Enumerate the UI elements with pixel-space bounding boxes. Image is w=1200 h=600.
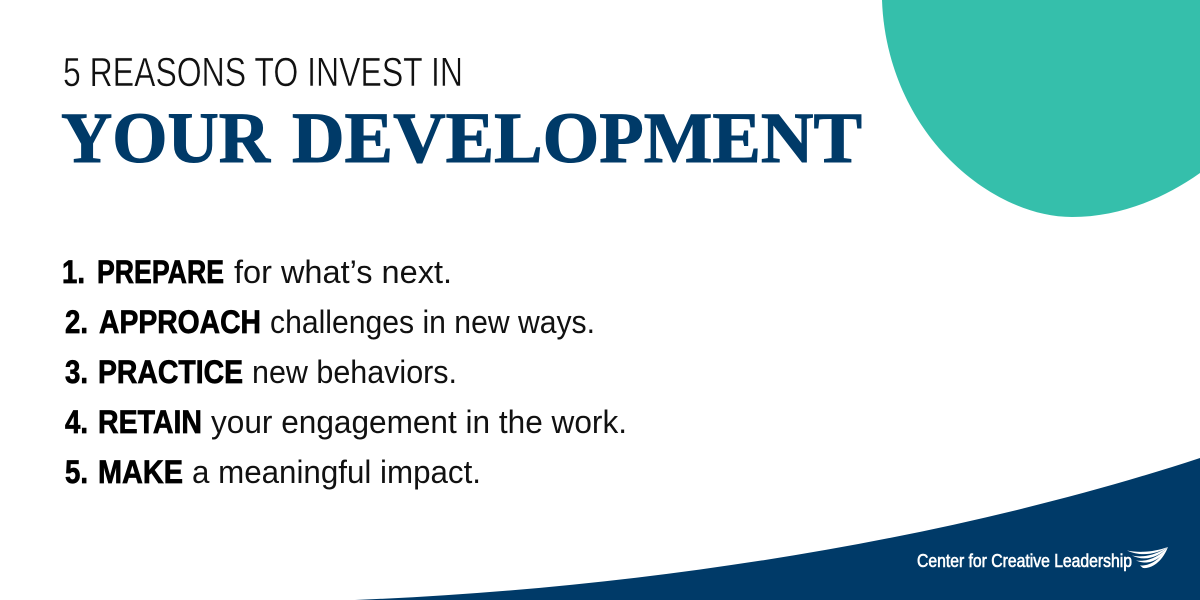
reason 5 bbox=[65, 454, 481, 490]
reason 1: for what’s next. bbox=[234, 254, 452, 290]
reason 1 bbox=[62, 254, 452, 290]
reason 1: PREPARE bbox=[97, 254, 224, 290]
teal blob bbox=[882, 0, 1200, 217]
reason 4: 4. bbox=[65, 404, 88, 440]
heading: 5 reasons to invest in: 5 REASONS TO INVEST IN bbox=[63, 49, 463, 95]
navy swoosh bbox=[355, 458, 1200, 600]
reasons list bbox=[62, 254, 627, 490]
reason 3: new behaviors. bbox=[252, 354, 457, 390]
reason 2: 2. bbox=[65, 304, 88, 340]
reason 5: a meaningful impact. bbox=[192, 454, 481, 490]
heading: your development: YOUR bbox=[61, 98, 271, 178]
logo: Center for Creative Leadership bbox=[917, 547, 1168, 571]
reason 2: challenges in new ways. bbox=[270, 304, 595, 340]
reason 5: 5. bbox=[65, 454, 88, 490]
reason 2 bbox=[65, 304, 595, 340]
icon: wing mark bbox=[1127, 547, 1168, 568]
reason 5: MAKE bbox=[98, 454, 183, 490]
reason 3: 3. bbox=[65, 354, 88, 390]
reason 3: PRACTICE bbox=[98, 354, 243, 390]
reason 1: 1. bbox=[62, 254, 85, 290]
reason 4: RETAIN bbox=[98, 404, 202, 440]
reason 2: APPROACH bbox=[99, 304, 261, 340]
heading: your development: DEVELOPMENT bbox=[292, 98, 862, 178]
reason 4: your engagement in the work. bbox=[211, 404, 627, 440]
reason 3 bbox=[65, 354, 457, 390]
logo wordmark: Center for Creative Leadership bbox=[917, 551, 1132, 571]
